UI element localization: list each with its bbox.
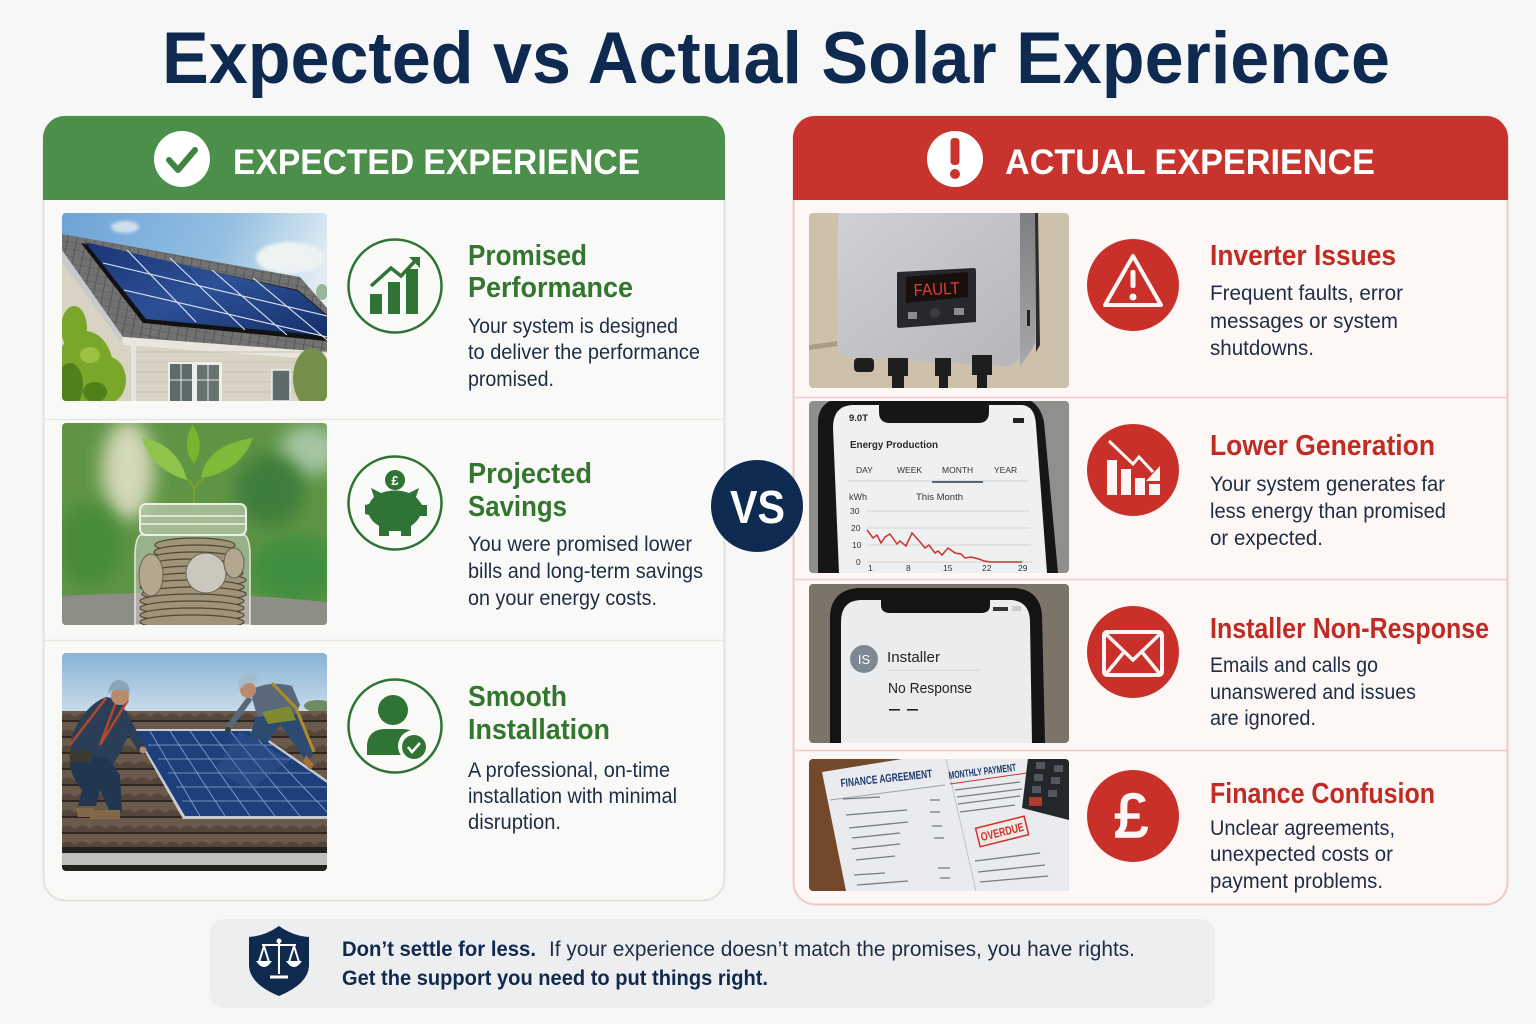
vs badge: VS: [730, 481, 785, 533]
text: projected savings: on your energy costs.: [468, 587, 657, 610]
callout text: Don’t settle for less.: [342, 937, 536, 961]
text: promised performance: promised.: [468, 368, 554, 391]
callout text: If your experience doesn’t match the promises, you have rights.: [549, 937, 1135, 961]
icon: falling generation chart: [1087, 424, 1179, 516]
panel: actual experience: [793, 116, 1508, 904]
text: lower generation: [1210, 430, 1446, 550]
photo: phone energy production app: 0: [856, 557, 861, 567]
icon: pound sign: £: [1114, 782, 1148, 851]
icon: performance chart: [348, 240, 442, 332]
text: inverter issues: shutdowns.: [1210, 337, 1314, 360]
text: installer non-response: are ignored.: [1210, 707, 1316, 730]
text: finance confusion: unexpected costs or: [1210, 843, 1393, 866]
text: promised performance: Performance: [468, 272, 633, 304]
text: projected savings: Projected: [468, 458, 592, 490]
text: lower generation: less energy than promised: [1210, 500, 1446, 523]
text: smooth installation: [468, 681, 677, 834]
left installer: [70, 680, 146, 819]
photo: seedling in a jar of coins: [58, 420, 340, 629]
icon: piggy bank: £: [391, 473, 399, 488]
text: promised performance: Your system is designed: [468, 315, 678, 338]
text: smooth installation: Smooth: [468, 681, 567, 713]
photo: phone energy production app: Energy Production: [850, 439, 938, 451]
text: inverter issues: [1210, 240, 1403, 360]
photo: phone energy production app: WEEK: [897, 465, 922, 475]
text: projected savings: You were promised lower: [468, 533, 692, 556]
photo: phone with installer no response: [809, 584, 1069, 743]
title: Expected vs Actual Solar Experience: [162, 18, 1390, 99]
text: projected savings: bills and long-term savings: [468, 560, 703, 583]
callout text: Get the support you need to put things right.: [342, 966, 768, 990]
text: inverter issues: Frequent faults, error: [1210, 282, 1403, 305]
right installer: [225, 673, 314, 770]
callout: know your rights: [210, 919, 1215, 1008]
text: inverter issues: messages or system: [1210, 310, 1398, 333]
photo: finance agreement with overdue stamp: OVERDUE: [979, 820, 1025, 844]
photo: phone energy production app: kWh: [849, 492, 867, 502]
photo: house with rooftop solar panels: [57, 213, 331, 408]
photo: installers fitting a panel on a tiled roof: [62, 653, 332, 871]
icon: person with check: [348, 680, 442, 772]
heading: actual experience: ACTUAL EXPERIENCE: [1005, 143, 1375, 182]
photo: phone energy production app: 22: [982, 563, 992, 573]
photo: phone energy production app: This Month: [916, 492, 963, 503]
icon: shield with scales: [249, 926, 309, 996]
text: lower generation: or expected.: [1210, 527, 1323, 550]
photo: phone with installer no response: IS: [858, 652, 870, 667]
text: finance confusion: Unclear agreements,: [1210, 817, 1395, 840]
photo: phone energy production app: DAY: [856, 465, 873, 475]
photo: phone energy production app: [809, 398, 1069, 573]
callout text: [342, 937, 1135, 990]
text: smooth installation: installation with minimal: [468, 785, 677, 808]
text: installer non-response: Installer Non-Response: [1210, 613, 1489, 645]
text: projected savings: Savings: [468, 491, 567, 523]
icon: warning triangle: [1087, 239, 1179, 331]
photo: phone energy production app: 9.0T: [849, 413, 868, 424]
photo: inverter showing fault: [809, 213, 1069, 388]
text: finance confusion: payment problems.: [1210, 870, 1383, 893]
text: promised performance: [468, 240, 700, 391]
panel: expected experience: [43, 116, 725, 900]
photo: finance agreement with overdue stamp: FINANCE AGREEMENT: [840, 768, 933, 790]
text: promised performance: to deliver the performance: [468, 341, 700, 364]
photo: phone energy production app: MONTH: [942, 465, 973, 475]
icon: exclamation mark: [927, 131, 983, 187]
icon: piggy bank: [348, 456, 442, 550]
photo: phone energy production app: YEAR: [994, 465, 1017, 475]
icon: pound sign: [1087, 770, 1179, 862]
panel header: actual experience: [793, 116, 1508, 200]
heading: expected experience: EXPECTED EXPERIENCE: [233, 143, 640, 182]
photo: phone energy production app: 1: [868, 563, 873, 573]
photo: phone energy production app: 20: [851, 523, 861, 533]
text: finance confusion: Finance Confusion: [1210, 778, 1435, 810]
text: installer non-response: Emails and calls go: [1210, 654, 1378, 677]
text: installer non-response: unanswered and issues: [1210, 681, 1416, 704]
panel header: expected experience: [43, 116, 725, 200]
text: inverter issues: Inverter Issues: [1210, 240, 1396, 272]
photo: phone with installer no response: Installer: [887, 649, 940, 666]
text: promised performance: Promised: [468, 240, 587, 272]
text: projected savings: [468, 458, 703, 610]
photo: phone energy production app: 8: [906, 563, 911, 573]
photo: inverter showing fault: FAULT: [913, 279, 960, 300]
icon: check mark: [154, 131, 210, 187]
photo: phone energy production app: 10: [852, 540, 862, 550]
vs badge: [711, 460, 803, 552]
photo: finance agreement with overdue stamp: [809, 758, 1069, 891]
photo: phone energy production app: 30: [850, 506, 860, 516]
text: smooth installation: A professional, on-time: [468, 759, 670, 782]
text: smooth installation: disruption.: [468, 811, 561, 834]
text: finance confusion: [1210, 778, 1435, 893]
text: installer non-response: [1210, 613, 1489, 730]
photo: phone energy production app: 15: [943, 563, 953, 573]
photo: phone with installer no response: No Response: [888, 680, 972, 697]
text: smooth installation: Installation: [468, 714, 610, 746]
photo: phone energy production app: 29: [1018, 563, 1028, 573]
text: lower generation: Lower Generation: [1210, 430, 1435, 462]
photo: finance agreement with overdue stamp: MONTHLY PAYMENT: [948, 762, 1017, 782]
icon: envelope: [1087, 606, 1179, 698]
text: lower generation: Your system generates far: [1210, 473, 1445, 496]
